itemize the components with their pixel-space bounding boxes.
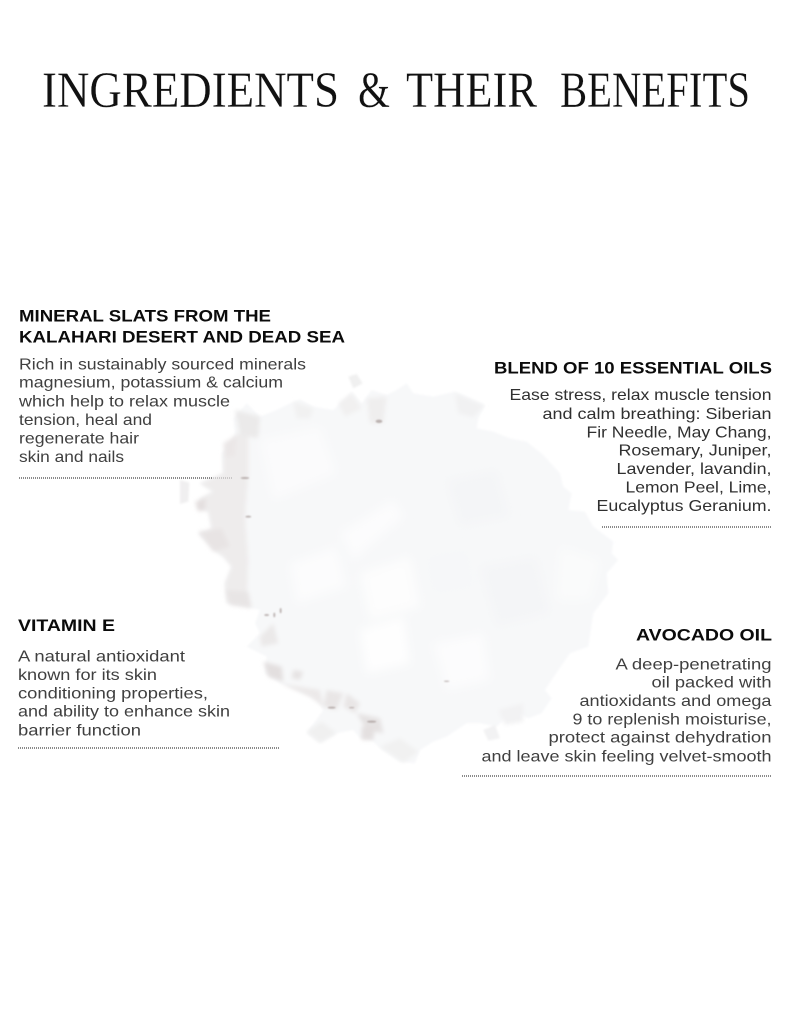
speck marks <box>241 420 449 723</box>
left warm edge of the pile <box>195 393 523 763</box>
text: mineral salts description: which help to relax muscle <box>18 394 230 410</box>
text: avocado oil description: and leave skin feeling velvet-smooth <box>482 748 772 765</box>
title: THEIR <box>406 63 537 119</box>
text: vitamin E description <box>18 649 230 739</box>
title <box>42 63 750 119</box>
panel: mineral salts <box>18 307 345 478</box>
text: essential oils description: Eucalyptus Geranium. <box>596 498 772 515</box>
heading: mineral salts: MINERAL SLATS FROM THE <box>19 307 271 326</box>
text: avocado oil description: oil packed with <box>652 675 772 692</box>
text: essential oils description: and calm breathing: Siberian <box>542 406 772 423</box>
text: vitamin E description: barrier function <box>18 722 141 739</box>
text: essential oils description: Rosemary, Juniper, <box>618 443 772 460</box>
text: vitamin E description: conditioning properties, <box>18 685 208 702</box>
text: essential oils description: Ease stress, relax muscle tension <box>510 387 772 404</box>
text: mineral salts description: tension, heal and <box>19 412 152 429</box>
text: essential oils description: Lemon Peel, Lime, <box>626 479 772 496</box>
heading: vitamin E: VITAMIN E <box>18 616 115 635</box>
text: avocado oil description: protect against dehydration <box>548 730 772 747</box>
text: vitamin E description: A natural antioxidant <box>18 649 186 666</box>
text: avocado oil description: 9 to replenish moisturise, <box>572 711 772 728</box>
text: mineral salts description <box>18 356 306 466</box>
heading: mineral salts <box>19 307 345 347</box>
text: essential oils description: Fir Needle, May Chang, <box>586 424 772 441</box>
text: vitamin E description: and ability to enhance skin <box>18 704 230 721</box>
heading: essential oils: BLEND OF 10 ESSENTIAL OILS <box>494 358 772 377</box>
panel: avocado oil <box>462 626 772 776</box>
text: mineral salts description: Rich in sustainably sourced minerals <box>19 356 306 373</box>
text: essential oils description: Lavender, lavandin, <box>616 461 772 478</box>
text: mineral salts description: regenerate hair <box>19 430 139 447</box>
image: pile of white salt flakes <box>180 374 618 763</box>
text: vitamin E description: known for its skin <box>18 667 157 684</box>
heading: mineral salts: KALAHARI DESERT AND DEAD SEA <box>19 328 345 347</box>
text: mineral salts description: skin and nails <box>19 449 124 466</box>
text: avocado oil description: A deep-penetrating <box>616 656 772 673</box>
title: INGREDIENTS <box>42 63 339 119</box>
text: mineral salts description: magnesium, potassium & calcium <box>19 375 283 392</box>
text: essential oils description <box>510 387 772 515</box>
panel: essential oils <box>494 358 772 527</box>
title: BENEFITS <box>560 63 750 119</box>
text: avocado oil description <box>482 656 772 765</box>
text: avocado oil description: antioxidants and omega <box>580 693 772 710</box>
heading: avocado oil: AVOCADO OIL <box>636 626 772 644</box>
facets inside the pile <box>260 427 600 690</box>
panel: vitamin E <box>18 616 280 748</box>
title: & <box>358 63 390 119</box>
